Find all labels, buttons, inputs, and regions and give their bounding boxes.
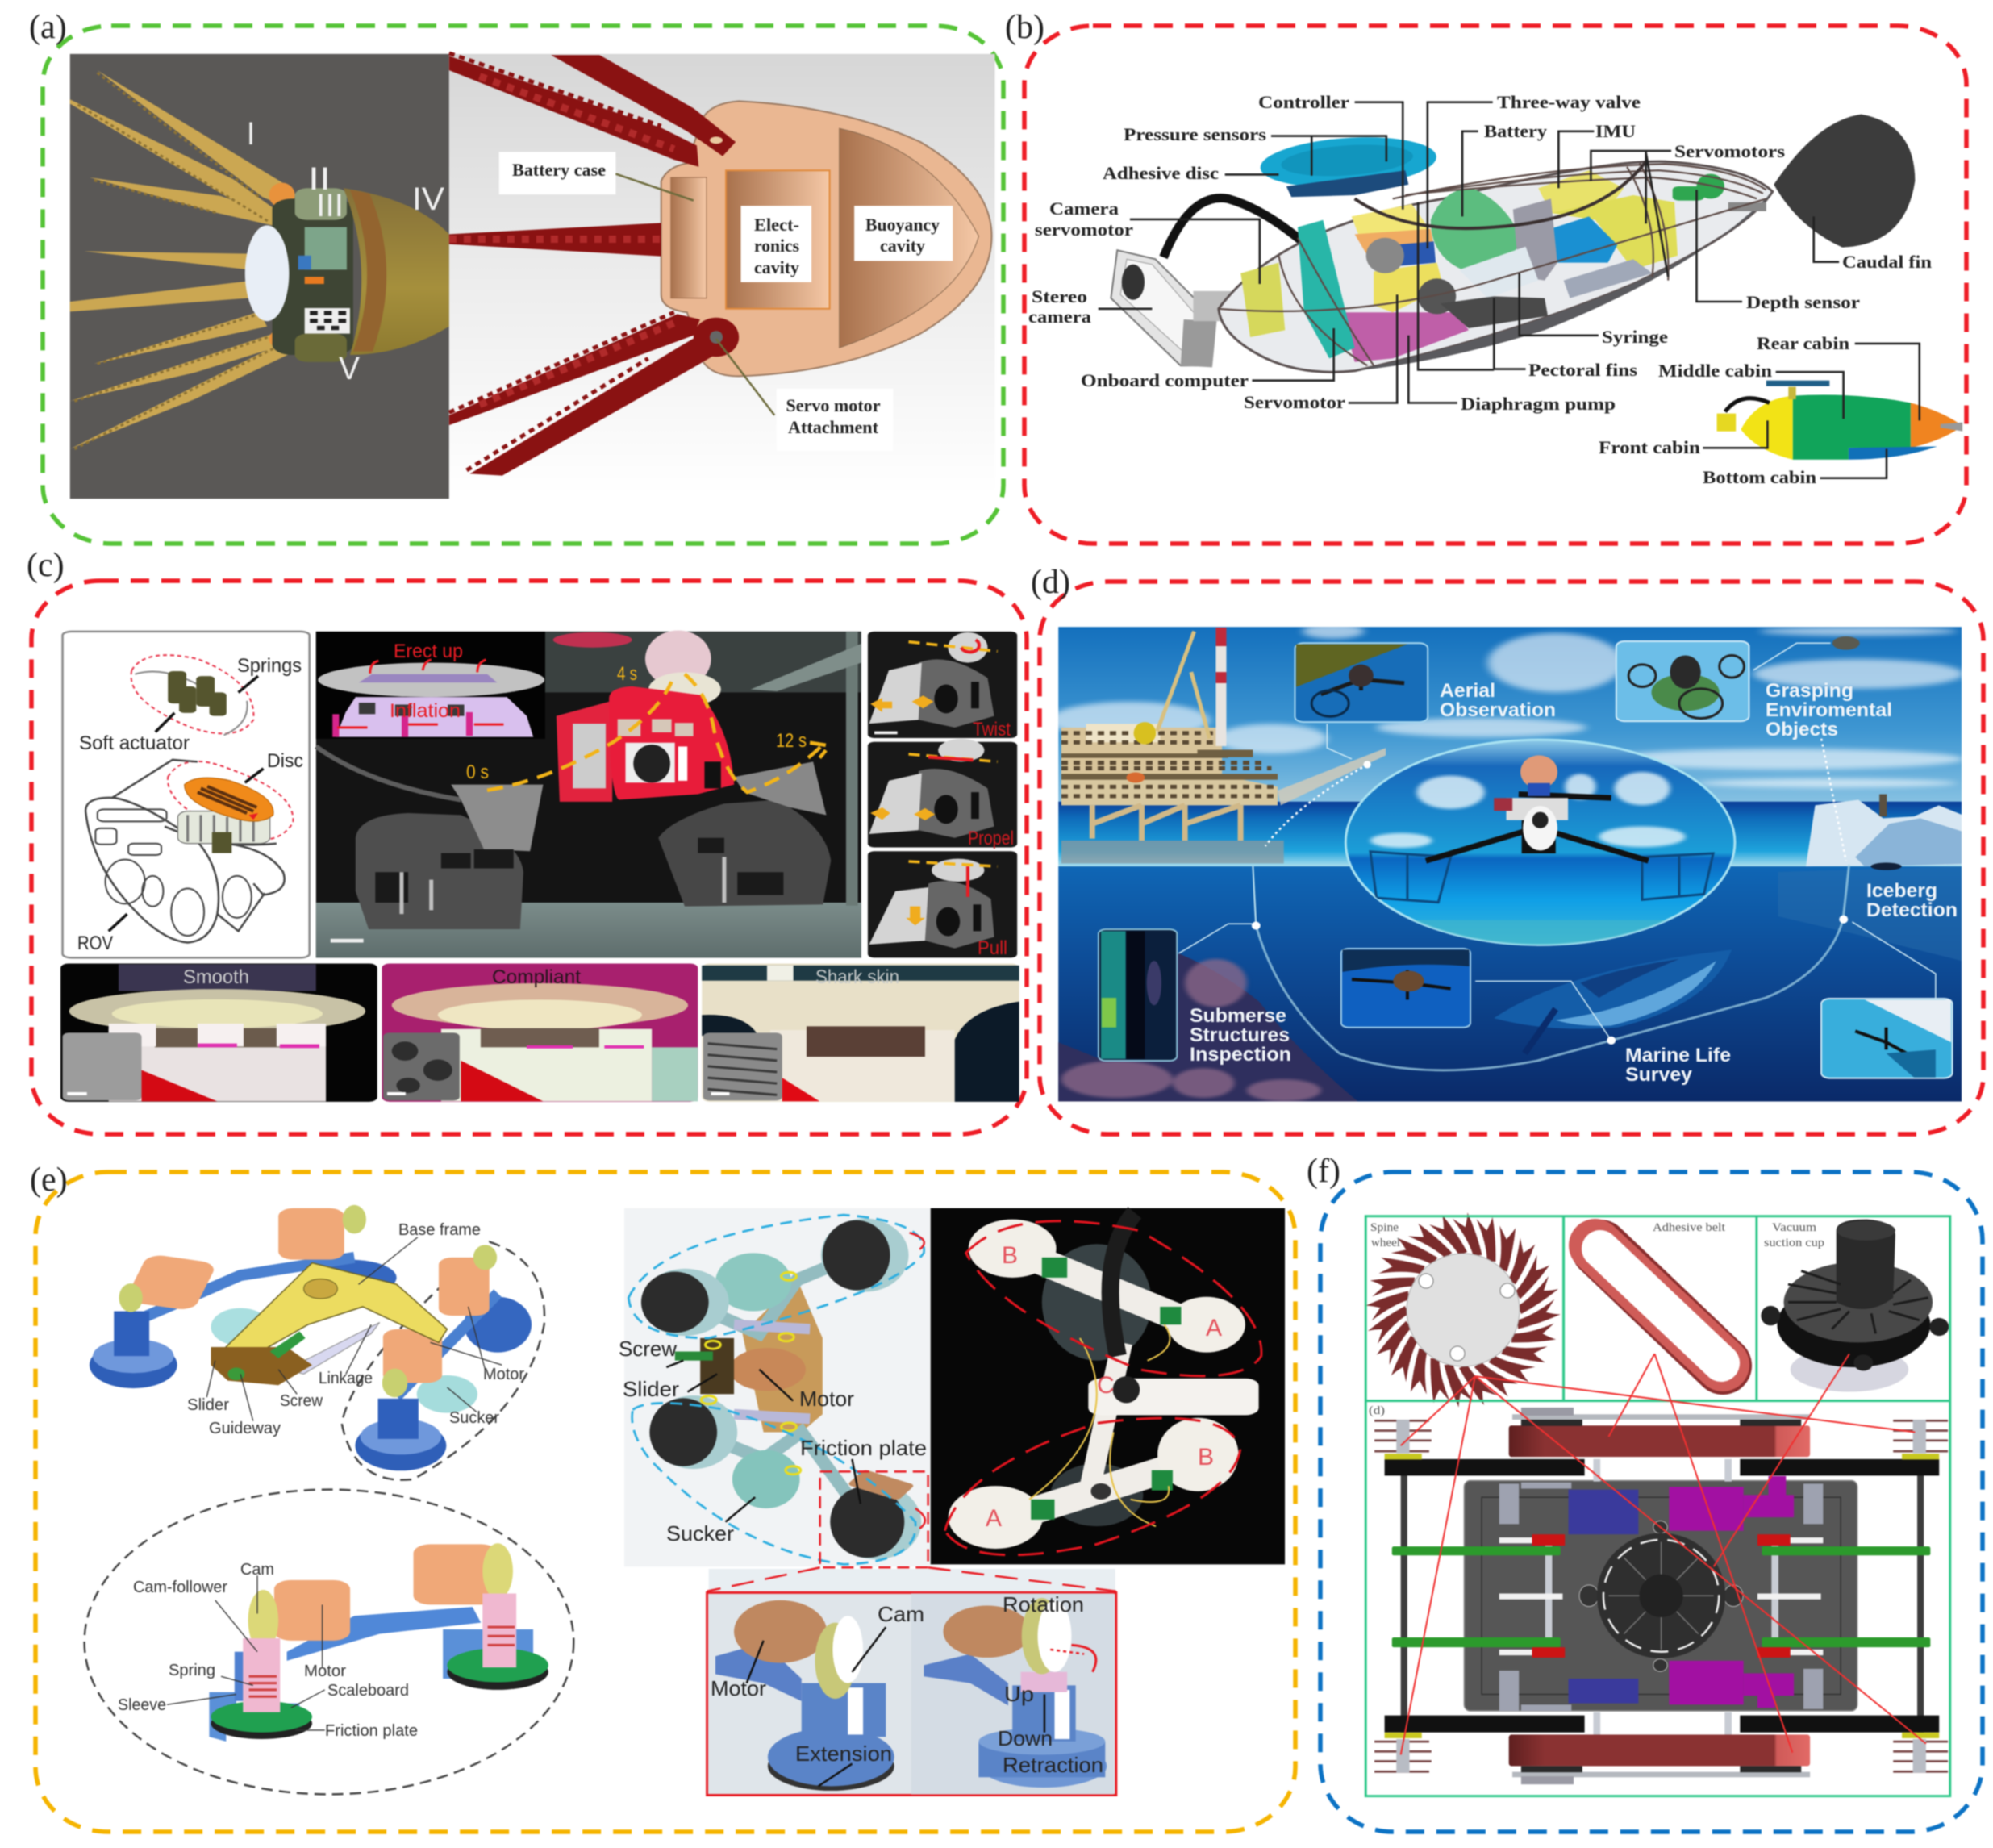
label: Guideway: Guideway xyxy=(209,1420,281,1437)
label: B: B xyxy=(1198,1444,1214,1470)
panel: (b) fish-like robot xyxy=(1005,9,1966,544)
label: V: V xyxy=(339,351,360,386)
frame: panel b dashed border xyxy=(1024,26,1966,544)
label: Twist: Twist xyxy=(973,719,1011,740)
label: Servo motor Attachment: Attachment xyxy=(788,417,879,437)
label: Adhesive belt: Adhesive belt xyxy=(1653,1221,1726,1234)
label: Elect-ronics cavity: cavity xyxy=(754,257,799,277)
label: Propel: Propel xyxy=(968,828,1014,849)
label: servomotor: servomotor xyxy=(1035,219,1133,240)
label: Sucker: Sucker xyxy=(666,1521,734,1546)
label: Springs: Springs xyxy=(237,655,302,677)
label: Motor: Motor xyxy=(304,1662,346,1680)
diagram: cam extension and retraction detail xyxy=(707,1567,1116,1795)
heading: (f): (f) xyxy=(1307,1153,1340,1190)
label: Servomotors: Servomotors xyxy=(1674,141,1785,161)
heading: (b): (b) xyxy=(1005,9,1044,46)
label: Diaphragm pump: Diaphragm pump xyxy=(1461,394,1616,414)
panel: (f) hybrid adhesion climbing robot xyxy=(1307,1153,1983,1832)
label: Pectoral fins: Pectoral fins xyxy=(1528,360,1638,380)
label: Iceberg: Iceberg xyxy=(1866,880,1937,902)
frame: panel e dashed border xyxy=(35,1172,1295,1832)
label: Grasping: Grasping xyxy=(1766,680,1853,702)
inset: iceberg detection xyxy=(1821,999,1953,1078)
wiring mesh inside hull xyxy=(1219,163,1766,365)
label: Three-way valve: Three-way valve xyxy=(1497,92,1641,112)
label: Depth sensor: Depth sensor xyxy=(1746,292,1860,312)
label: Vacuum suction cup: suction cup xyxy=(1764,1237,1824,1249)
photos: twist, propel and pull side panels xyxy=(868,632,1017,957)
coral xyxy=(1058,953,1358,1102)
label: 12 s: 12 s xyxy=(776,730,807,752)
label: Cam: Cam xyxy=(240,1561,274,1579)
label: IV: IV xyxy=(412,181,444,217)
label: IMU: IMU xyxy=(1595,121,1636,141)
label: Stereo: Stereo xyxy=(1032,286,1087,307)
label: Extension: Extension xyxy=(795,1742,892,1766)
label: Inspection: Inspection xyxy=(1190,1044,1291,1066)
label: Shark skin: Shark skin xyxy=(815,966,899,988)
label: Spring: Spring xyxy=(169,1662,215,1679)
panel: (c) suction disc ROV xyxy=(27,547,1027,1134)
label: Observation: Observation xyxy=(1440,699,1556,721)
bubble xyxy=(1345,740,1735,945)
label: Middle cabin: Middle cabin xyxy=(1658,361,1772,381)
frame: panel c dashed border xyxy=(31,581,1027,1134)
inset: marine life xyxy=(1341,949,1470,1028)
label: Inflation: Inflation xyxy=(390,700,461,722)
label: Base frame: Base frame xyxy=(398,1221,481,1239)
diagram: vacuum suction cup xyxy=(1761,1220,1949,1392)
label: Marine Life: Marine Life xyxy=(1625,1045,1731,1066)
label: Camera: Camera xyxy=(1049,198,1119,219)
wake and callout lines xyxy=(1256,865,1849,1070)
label: Sucker: Sucker xyxy=(449,1409,499,1427)
label: Servo motor Attachment xyxy=(786,395,881,437)
label: Onboard computer: Onboard computer xyxy=(1081,370,1249,390)
frame: panel d dashed border xyxy=(1040,582,1983,1134)
photo: real robot on black background xyxy=(931,1208,1285,1564)
label: 0 s: 0 s xyxy=(466,761,489,783)
label: Friction plate: Friction plate xyxy=(800,1436,927,1460)
label: C: C xyxy=(1097,1372,1115,1399)
diagram: four-foot robot isometric xyxy=(90,1205,544,1480)
label: II: II xyxy=(308,161,331,197)
label: Detection: Detection xyxy=(1866,899,1958,921)
label: Aerial: Aerial xyxy=(1440,680,1495,702)
label: Pull: Pull xyxy=(978,937,1007,959)
diagram: adhesive belt xyxy=(1595,1245,1723,1366)
label: Bottom cabin: Bottom cabin xyxy=(1703,467,1816,487)
label: I: I xyxy=(247,116,255,152)
label: Buoyancy cavity: cavity xyxy=(880,236,925,256)
heading: (c): (c) xyxy=(27,547,65,584)
heading: (e): (e) xyxy=(30,1162,68,1199)
leader lines xyxy=(1099,102,1920,478)
rig xyxy=(1060,779,1279,807)
label: Friction plate: Friction plate xyxy=(325,1722,418,1740)
heading: (d): (d) xyxy=(1031,564,1070,601)
label: Elect-ronics cavity xyxy=(754,215,799,277)
label: B: B xyxy=(1002,1242,1018,1269)
label: Motor: Motor xyxy=(711,1676,766,1700)
label: Erect up: Erect up xyxy=(394,640,463,662)
label: ROV: ROV xyxy=(77,932,113,954)
label: Submerse: Submerse xyxy=(1190,1005,1286,1027)
annotation lines: component call-outs xyxy=(1401,1354,1926,1754)
label: Vacuum suction cup: Vacuum xyxy=(1772,1221,1816,1234)
small fish overview xyxy=(1741,396,1793,460)
label: Linkage: Linkage xyxy=(319,1370,373,1387)
label: Spine wheel: wheel xyxy=(1371,1237,1400,1249)
label: Elect-ronics cavity: Elect- xyxy=(754,215,799,235)
label: Spine wheel: Spine xyxy=(1370,1221,1399,1234)
label: Buoyancy cavity: Buoyancy xyxy=(865,215,940,235)
label: Screw: Screw xyxy=(280,1392,323,1410)
label: Down: Down xyxy=(998,1726,1053,1750)
label: Sleeve: Sleeve xyxy=(118,1696,166,1714)
label: Structures: Structures xyxy=(1190,1024,1290,1046)
label: camera: camera xyxy=(1028,307,1091,327)
label: Retraction: Retraction xyxy=(1003,1753,1103,1777)
label: A: A xyxy=(986,1505,1002,1532)
inset: grasping xyxy=(1616,641,1749,721)
label: Caudal fin: Caudal fin xyxy=(1842,252,1932,272)
label: Spine wheel xyxy=(1370,1221,1400,1249)
label: (d) inner tag: (d) xyxy=(1369,1404,1385,1417)
label: Cam-follower: Cam-follower xyxy=(133,1579,227,1596)
label: Pressure sensors: Pressure sensors xyxy=(1124,124,1266,144)
label: Soft actuator: Soft actuator xyxy=(79,732,190,754)
label: Survey: Survey xyxy=(1625,1064,1693,1086)
iceberg xyxy=(1778,866,1962,961)
label: III: III xyxy=(316,188,344,223)
label: A: A xyxy=(1206,1315,1222,1341)
inset: disc with soft actuators xyxy=(316,632,545,739)
label: Motor: Motor xyxy=(799,1387,854,1411)
label: Controller: Controller xyxy=(1258,92,1349,112)
drone xyxy=(1426,795,1649,861)
label: Compliant: Compliant xyxy=(492,966,581,988)
label: 4 s: 4 s xyxy=(617,663,637,685)
label: Slider: Slider xyxy=(187,1396,229,1414)
label: Battery: Battery xyxy=(1484,121,1547,141)
label: Disc: Disc xyxy=(267,750,303,772)
panel: (e) cam-driven suckers robot xyxy=(30,1162,1295,1832)
frame: panel a dashed border xyxy=(43,26,1003,544)
photo: robot with spines on dark background xyxy=(70,54,449,499)
photos: smooth, compliant and shark skin discs xyxy=(60,963,1019,1102)
heading: (a): (a) xyxy=(29,9,67,46)
diagram: cam-follower leg detail xyxy=(85,1490,573,1794)
label: Cam: Cam xyxy=(878,1602,924,1626)
diagram: CAD section of the robot body xyxy=(449,53,995,499)
whale xyxy=(1494,949,1732,1029)
diagram: fish robot exploded view xyxy=(1099,102,1962,478)
illustration: ocean scene xyxy=(1049,624,1963,1103)
label: Vacuum suction cup xyxy=(1764,1221,1824,1249)
panel: (a) bio-inspired gripper robot xyxy=(29,9,1003,544)
label: Rotation: Rotation xyxy=(1003,1592,1084,1616)
label: Motor: Motor xyxy=(483,1366,524,1383)
diagram: spine wheel xyxy=(1362,1209,1564,1411)
label: Up: Up xyxy=(1004,1682,1034,1706)
diagram: top view robot chassis xyxy=(1374,1408,1948,1784)
label: Scaleboard: Scaleboard xyxy=(327,1682,409,1700)
photo: tank time-lapse of the ROV xyxy=(316,630,861,957)
label: Front cabin: Front cabin xyxy=(1599,437,1700,457)
frame: green component boxes xyxy=(1365,1216,1950,1796)
diagram: robot underside CAD render xyxy=(624,1208,931,1567)
label: Syringe: Syringe xyxy=(1602,327,1668,347)
label: Slider: Slider xyxy=(623,1377,679,1401)
label: Adhesive disc: Adhesive disc xyxy=(1103,163,1219,183)
frame: panel f dashed border xyxy=(1320,1172,1983,1832)
label: Smooth: Smooth xyxy=(183,966,249,988)
label: Rear cabin: Rear cabin xyxy=(1757,333,1849,353)
label: Elect-ronics cavity: ronics xyxy=(754,236,799,256)
label: Buoyancy cavity xyxy=(865,215,940,256)
label: Servo motor Attachment: Servo motor xyxy=(786,395,881,415)
label: Enviromental: Enviromental xyxy=(1766,699,1892,721)
label: Servomotor: Servomotor xyxy=(1244,392,1345,412)
diagram: ROV line drawing box xyxy=(63,632,310,957)
inset: submerse structure xyxy=(1099,929,1177,1061)
panel: (d) amphibious drone scenarios xyxy=(1031,564,1983,1134)
label: Screw: Screw xyxy=(619,1337,677,1361)
label: Battery case: Battery case xyxy=(512,160,606,180)
label: Objects: Objects xyxy=(1766,719,1838,740)
inset: aerial xyxy=(1295,643,1428,722)
